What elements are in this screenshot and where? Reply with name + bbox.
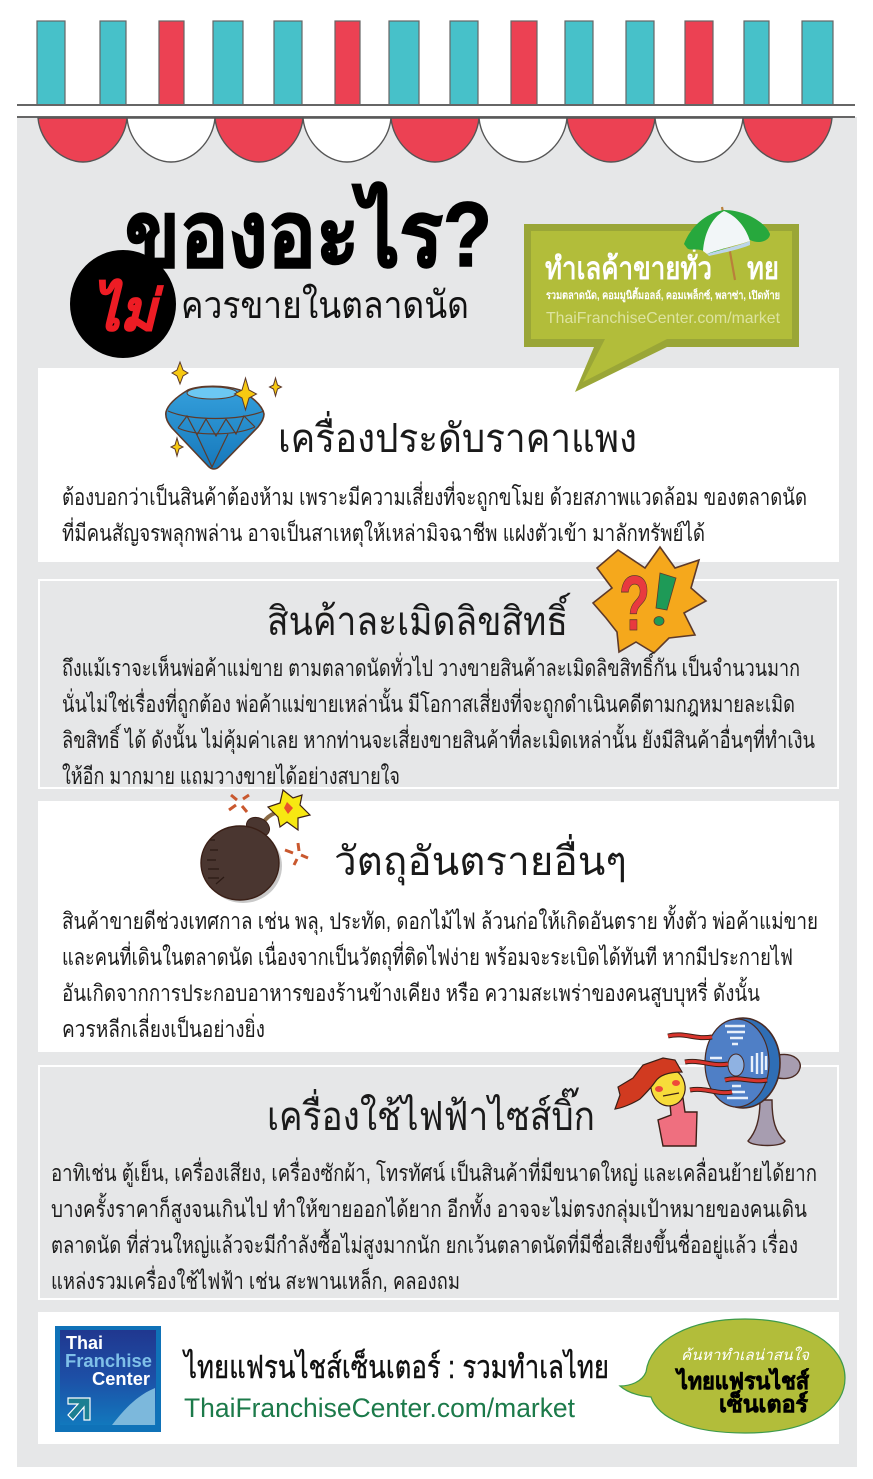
card 1: jewelry [38, 362, 839, 562]
card 3 body [62, 905, 818, 1042]
footer panel [38, 1312, 845, 1444]
logo: Thai [66, 1333, 103, 1353]
awning scallops [38, 118, 832, 162]
logo: Center [92, 1369, 150, 1389]
card 4: large appliances [39, 1018, 838, 1299]
badge: not: ไม่ [92, 278, 164, 342]
card 4 body: แหล่งรวมเครื่องใช้ไฟฟ้า เช่น สะพานเหล็ก, คลองถม [51, 1265, 460, 1294]
card 2 body [62, 651, 815, 789]
card 3 body: ควรหลีกเลี่ยงเป็นอย่างยิ่ง [62, 1013, 265, 1042]
sparkles [171, 362, 282, 456]
awning stripes [37, 21, 833, 105]
promo heading: ทำเลค้าขายทั่ว [545, 246, 712, 286]
icon: burst with ?!: ? [619, 559, 650, 647]
card 2: copyright [39, 547, 838, 789]
icon: burst with ?! [593, 547, 706, 653]
awning rails [17, 104, 855, 118]
card 3 heading: วัตถุอันตรายอื่นๆ [334, 834, 627, 886]
speech bubble: search [620, 1319, 845, 1433]
speech bubble: search: ค้นหาทำเลน่าสนใจ [681, 1346, 810, 1364]
speech bubble: promo [524, 224, 799, 392]
icon: fan and woman [615, 1018, 800, 1146]
speech bubble: search: เซ็นเตอร์ [719, 1389, 809, 1417]
card 2 heading: สินค้าละเมิดลิขสิทธิ์ [267, 592, 571, 644]
icon: umbrella [684, 207, 770, 280]
card 1 heading: เครื่องประดับราคาแพง [278, 411, 637, 461]
icon: bomb [201, 790, 310, 903]
card 1 body: ที่มีคนสัญจรพลุกพล่าน อาจเป็นสาเหตุให้เหล่ามิจฉาชีพ แฝงตัวเข้า มาลักทรัพย์ได้ [62, 517, 705, 547]
icon: diamond [166, 362, 282, 469]
promo subheading: รวมตลาดนัด, คอมมูนิตี้มอลล์, คอมเพล็กซ์, พลาซ่า, เปิดท้าย [546, 287, 780, 303]
card 4 heading: เครื่องใช้ไฟฟ้าไซส์บิ๊ก [267, 1087, 595, 1139]
promo url: ThaiFranchiseCenter.com/market [546, 310, 781, 327]
card 4 body [51, 1157, 817, 1294]
promo heading end: ทย [747, 251, 779, 286]
badge: not [70, 250, 176, 358]
speech bubble: search: ไทยแฟรนไชส์ [674, 1367, 810, 1394]
footer url: ThaiFranchiseCenter.com/market [184, 1393, 576, 1423]
footer heading: ไทยแฟรนไชส์เซ็นเตอร์ : รวมทำเลไทย [182, 1348, 609, 1385]
logo: Franchise [65, 1351, 152, 1371]
card 3: dangerous goods [38, 790, 839, 1052]
card 2 body: ให้อีก มากมาย แถมวางขายได้อย่างสบายใจ [62, 763, 400, 789]
title: ของอะไร? [125, 182, 492, 286]
subtitle: ควรขายในตลาดนัด [181, 284, 469, 327]
card 1 body [62, 481, 807, 547]
logo [55, 1326, 161, 1432]
